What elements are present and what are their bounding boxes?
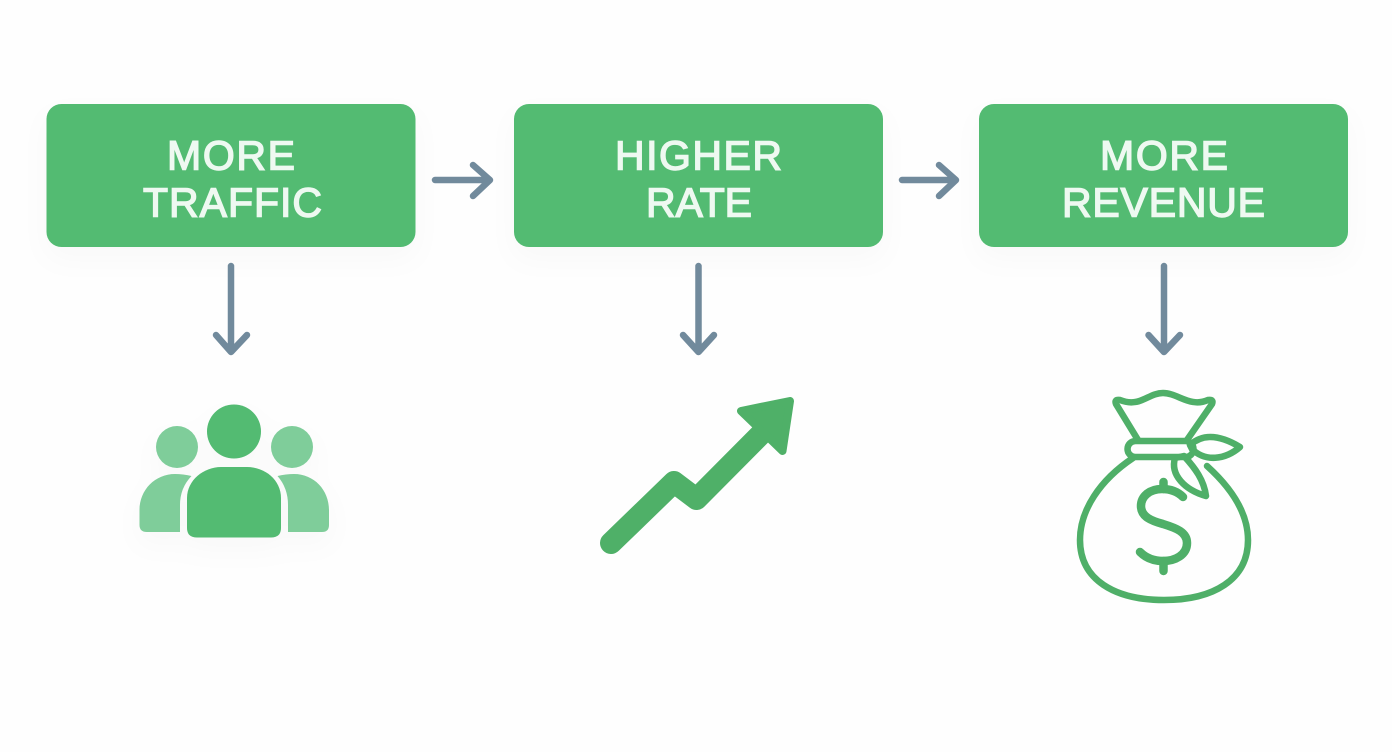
- heading: higher rate: RATE: [646, 180, 752, 226]
- arrow: rate to revenue: [902, 165, 956, 196]
- bag tie: [1128, 441, 1194, 457]
- bag neck: [1116, 393, 1212, 440]
- arrow: revenue down: [1148, 266, 1180, 352]
- heading: higher rate: HIGHER: [615, 132, 782, 178]
- arrow: traffic to rate: [435, 165, 490, 196]
- arrow: traffic down: [216, 266, 247, 352]
- dollar sign: [1140, 482, 1187, 571]
- right ribbon: [1190, 437, 1240, 458]
- heading: more traffic: TRAFFIC: [143, 180, 322, 226]
- icon: money bag: [1080, 393, 1248, 600]
- icon: people group: [140, 404, 329, 538]
- lower ribbon: [1174, 456, 1206, 496]
- panel: higher rate: [514, 104, 883, 247]
- panel: more revenue: [979, 104, 1348, 247]
- icon: growth arrow: [611, 401, 790, 543]
- panel: more traffic: [46, 104, 416, 247]
- heading: more traffic: MORE: [167, 132, 295, 178]
- bag body: [1080, 458, 1248, 600]
- heading: more revenue: MORE: [1100, 132, 1228, 178]
- heading: more revenue: REVENUE: [1062, 180, 1265, 226]
- arrow: rate down: [683, 266, 714, 352]
